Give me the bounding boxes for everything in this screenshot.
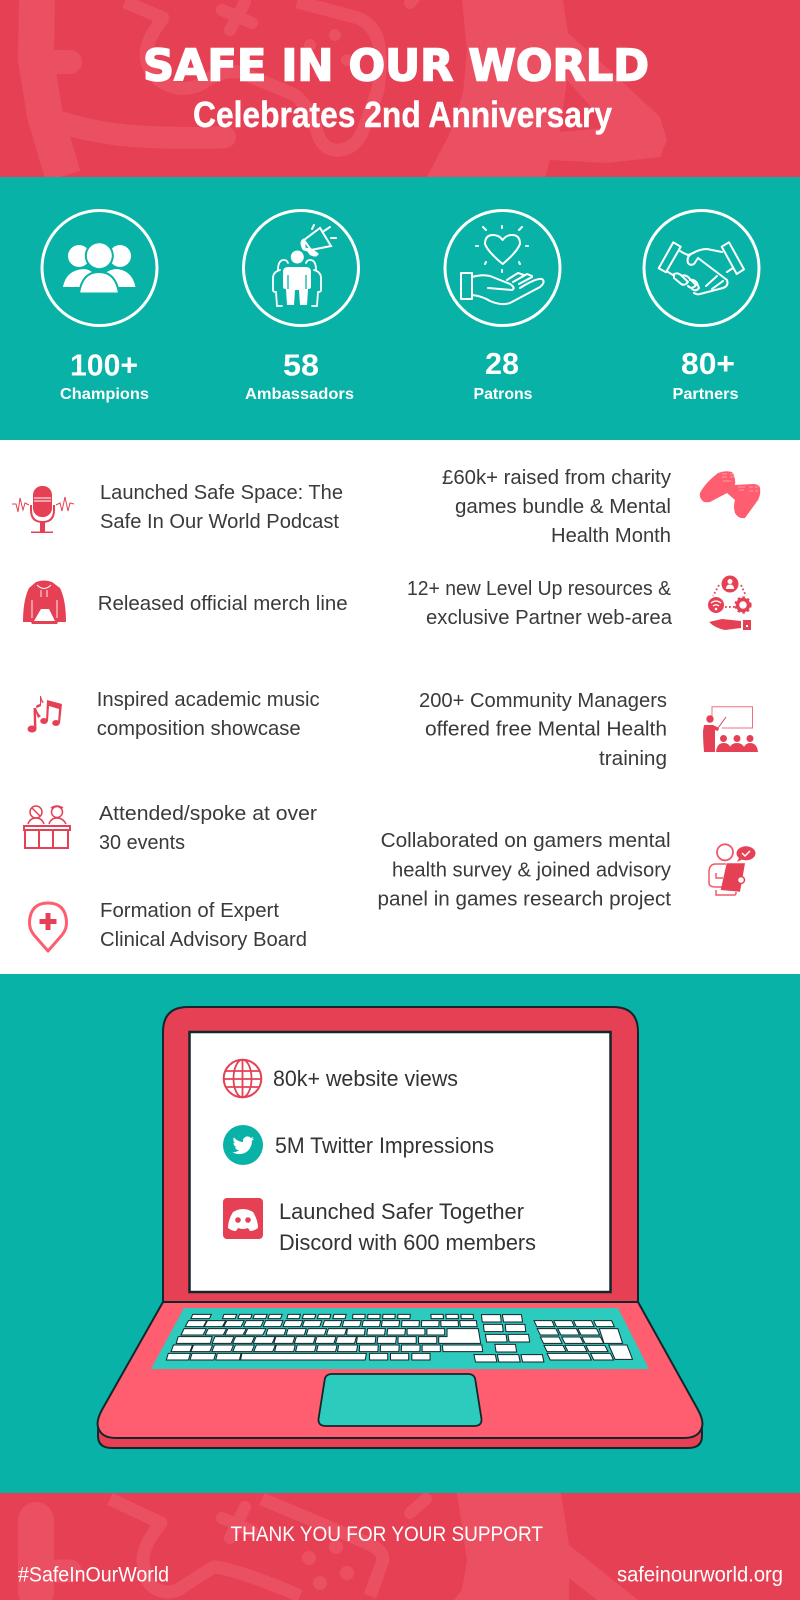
keyboard keys — [166, 1314, 632, 1362]
panel: achievements — [0, 440, 800, 974]
stat: partners: 80+ — [681, 346, 735, 381]
item: events: Attended/spoke at over — [99, 802, 317, 825]
icon: globe — [224, 1060, 261, 1097]
icon: twitter — [223, 1125, 263, 1165]
item: training: 200+ Community Managers — [419, 689, 667, 712]
footer website: safeinourworld.org — [617, 1564, 783, 1586]
item: training: training — [599, 747, 667, 770]
icon: microphone — [12, 486, 74, 533]
stat: ambassadors — [244, 210, 358, 403]
laptop screen — [190, 1032, 610, 1292]
keyboard well — [151, 1308, 649, 1369]
icon: music notes — [28, 696, 62, 732]
item: resources: exclusive Partner web-area — [426, 606, 673, 629]
item: research: panel in games research project — [378, 888, 671, 911]
icon: discord — [223, 1198, 263, 1239]
stat: patrons — [445, 210, 560, 403]
item: music — [28, 688, 320, 740]
item: advisory board: Clinical Advisory Board — [100, 928, 307, 951]
item: events — [24, 802, 317, 854]
item: music: Inspired academic music — [97, 688, 320, 711]
screen stat: twitter — [223, 1125, 494, 1165]
icon: people group — [63, 242, 136, 294]
item: podcast: Launched Safe Space: The — [100, 481, 343, 504]
item: merch — [23, 580, 348, 624]
panel: laptop section — [0, 974, 800, 1493]
item: training: offered free Mental Health — [425, 718, 667, 740]
footer band — [0, 1493, 800, 1600]
item: podcast — [12, 481, 343, 533]
laptop base — [98, 1302, 702, 1438]
subtitle: Celebrates 2nd Anniversary — [193, 94, 612, 135]
icon: game controller — [700, 471, 760, 518]
laptop illustration — [98, 1007, 702, 1448]
footer hashtag: #SafeInOurWorld — [18, 1564, 169, 1586]
laptop lid — [163, 1007, 638, 1304]
footer thanks: THANK YOU FOR YOUR SUPPORT — [230, 1523, 543, 1546]
item: fundraising: Health Month — [551, 524, 671, 547]
icon: network hand — [708, 576, 751, 630]
screen stat: discord: Launched Safer Together — [279, 1199, 524, 1224]
stat: champions: 100+ — [70, 348, 138, 382]
screen stat: discord: Discord with 600 members — [279, 1230, 536, 1255]
item: fundraising — [442, 466, 760, 547]
stat: patrons: 28 — [485, 346, 519, 381]
item: advisory board: Formation of Expert — [100, 899, 279, 922]
stat: partners — [644, 210, 759, 403]
icon: speakers at panel desk — [24, 806, 70, 848]
item: events: 30 events — [99, 831, 185, 854]
screen stat: twitter: 5M Twitter Impressions — [275, 1133, 494, 1158]
icon: trainer with audience — [703, 707, 758, 752]
screen stat: website views: 80k+ website views — [273, 1066, 458, 1091]
icon: heart in hand — [461, 226, 544, 304]
panel: stats — [0, 177, 800, 440]
stat: champions: Champions — [60, 386, 149, 403]
stat: champions — [42, 210, 157, 403]
item: advisory board — [29, 899, 307, 951]
icon: handshake — [659, 242, 744, 294]
screen stat: website views — [224, 1060, 458, 1097]
stat: patrons: Patrons — [474, 386, 532, 403]
stat: partners: Partners — [672, 386, 738, 403]
item: fundraising: games bundle & Mental — [455, 495, 671, 518]
icon: survey person with tablet — [709, 844, 756, 895]
item: merch: Released official merch line — [98, 592, 348, 615]
icon: medical pin — [29, 903, 67, 951]
item: podcast: Safe In Our World Podcast — [100, 510, 339, 533]
icon: hoodie — [23, 580, 66, 624]
header band — [0, 0, 800, 177]
icon: ambassador with megaphone — [273, 225, 336, 306]
item: research — [378, 829, 756, 911]
laptop base underside — [98, 1424, 702, 1448]
item: research: Collaborated on gamers mental — [381, 829, 671, 852]
item: research: health survey & joined advisory — [392, 859, 672, 882]
item: music: composition showcase — [97, 717, 301, 740]
stat: ambassadors: Ambassadors — [245, 386, 354, 403]
item: fundraising: £60k+ raised from charity — [442, 466, 672, 489]
stat: ambassadors: 58 — [283, 348, 319, 382]
screen stat: discord — [223, 1198, 536, 1255]
title: SAFE IN OUR WORLD — [143, 40, 649, 92]
item: training — [419, 689, 758, 770]
item: resources — [407, 576, 751, 630]
trackpad — [318, 1374, 482, 1426]
item: resources: 12+ new Level Up resources & — [407, 577, 671, 600]
